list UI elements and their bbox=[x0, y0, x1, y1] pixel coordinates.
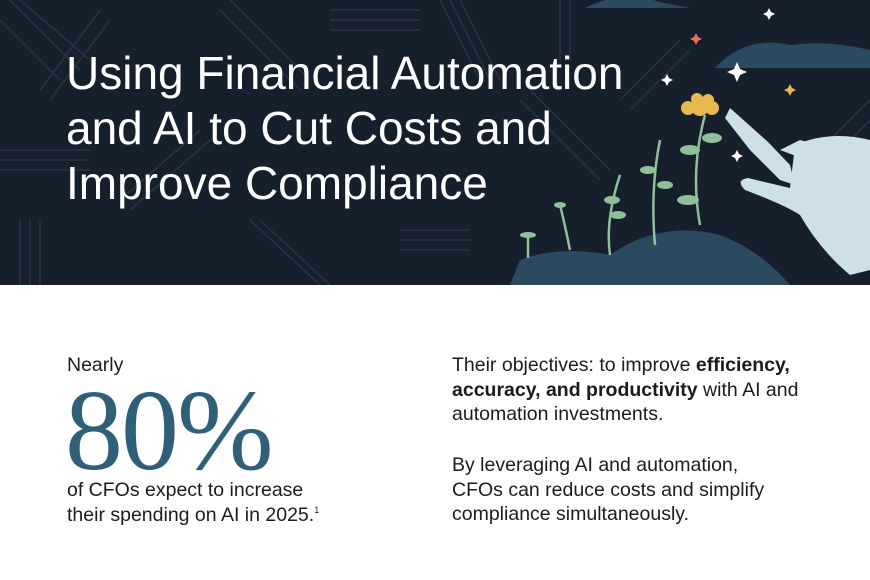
text: leveraging: compliance simultaneously. bbox=[452, 503, 689, 525]
plants bbox=[528, 115, 705, 258]
flower bbox=[681, 93, 719, 116]
text: leveraging: CFOs can reduce costs and simplify bbox=[452, 478, 764, 500]
robot hand bbox=[725, 108, 870, 275]
text: objectives: automation investments. bbox=[452, 403, 663, 425]
text: objectives bbox=[452, 354, 798, 425]
text: leveraging: By leveraging AI and automation, bbox=[452, 454, 738, 476]
stat description: of CFOs expect to increase bbox=[67, 479, 303, 501]
title: and AI to Cut Costs and bbox=[66, 102, 552, 154]
text: objectives: Their objectives: to improve efficiency, bbox=[452, 354, 790, 376]
title: Improve Compliance bbox=[66, 157, 488, 209]
big number: 80% bbox=[65, 367, 272, 495]
text: objectives: accuracy, and productivity with AI and bbox=[452, 378, 798, 400]
stat description: their spending on AI in 2025.1 bbox=[67, 504, 319, 526]
text: leveraging bbox=[452, 454, 764, 525]
label: Nearly: Nearly bbox=[67, 354, 123, 376]
stars bbox=[661, 8, 775, 162]
header banner bbox=[0, 0, 870, 285]
hills bbox=[510, 230, 790, 285]
stat description bbox=[67, 479, 319, 526]
clouds bbox=[585, 0, 690, 8]
title bbox=[66, 47, 623, 209]
stat block: 80% bbox=[65, 354, 319, 526]
title: Using Financial Automation bbox=[66, 47, 623, 99]
